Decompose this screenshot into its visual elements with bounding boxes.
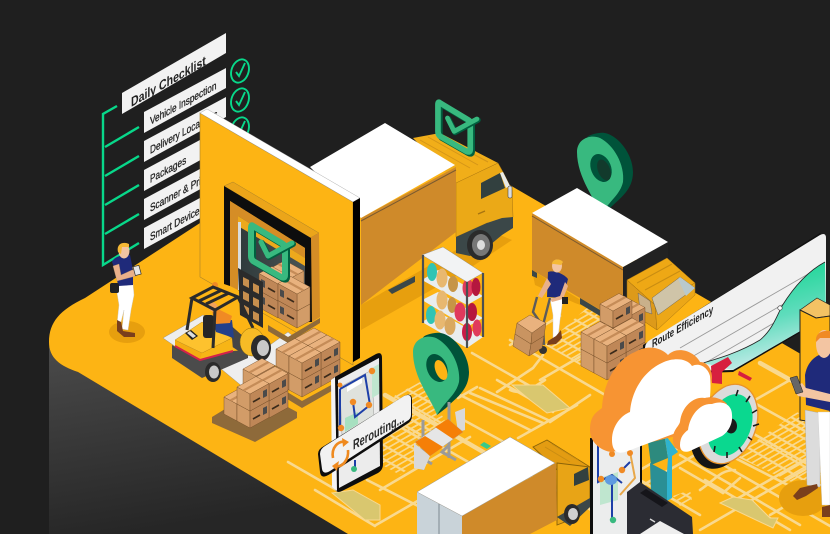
platform top surface xyxy=(49,162,830,534)
check circles xyxy=(228,57,252,143)
checklist row: scanner and printer xyxy=(144,155,226,220)
panel: daily checklist xyxy=(103,33,252,265)
forklift wheels xyxy=(205,335,271,382)
truck 3 xyxy=(417,437,590,534)
truck 3 cargo roof xyxy=(417,437,555,516)
checklist row: smart device xyxy=(144,184,226,249)
checklist header xyxy=(122,33,226,114)
tall yellow box xyxy=(800,298,830,425)
checklist row: delivery locations xyxy=(144,97,226,162)
rerouting callout: Rerouting... xyxy=(353,410,404,453)
street map on the platform xyxy=(288,305,830,530)
truck 1 cargo side xyxy=(361,167,456,305)
rerouting callout xyxy=(318,395,412,477)
green check badge above truck xyxy=(438,102,478,154)
truck 1 undercarriage xyxy=(388,276,415,294)
truck 2 cargo roof xyxy=(532,188,668,267)
checklist row: vehicle inspection: Vehicle Inspection xyxy=(150,80,217,128)
checklist row: delivery locations: Delivery Locations xyxy=(150,109,217,157)
person with tablet, left xyxy=(110,243,141,337)
wall face xyxy=(200,113,353,365)
forklift base xyxy=(172,345,248,378)
pallet with boxes near phone xyxy=(274,328,344,408)
checklist row: packages: Packages xyxy=(150,155,186,186)
truck 1 cab xyxy=(413,133,513,256)
truck 2 cargo back xyxy=(623,242,668,323)
road barrier xyxy=(414,402,465,470)
stacked boxes in doorway xyxy=(259,260,310,328)
checklist header: Daily Checklist xyxy=(131,52,206,110)
smartphone with map route xyxy=(331,353,383,492)
pallet with boxes front xyxy=(212,358,297,442)
hand truck frame and wheel xyxy=(533,297,550,345)
pin marker over map xyxy=(413,333,469,415)
wall top edge xyxy=(200,109,360,202)
checklist row: scanner and printer: Scanner & Printer xyxy=(150,168,216,215)
truck 3 cargo back doors xyxy=(417,492,462,534)
boxes beside truck 2 xyxy=(581,294,645,380)
mobile printer xyxy=(627,482,693,534)
shelving unit with rolls xyxy=(422,247,483,348)
icon: refresh arrows xyxy=(332,438,349,471)
forklift cage xyxy=(187,287,253,348)
forklift driver xyxy=(203,282,234,338)
forklift cylinder xyxy=(240,328,264,356)
checklist row: packages xyxy=(144,126,226,191)
forklift mast xyxy=(238,268,263,328)
loading dock door xyxy=(224,182,320,322)
platform side wall xyxy=(49,342,348,534)
route efficiency chart panel xyxy=(643,233,826,375)
truck 1 xyxy=(310,123,513,305)
checklist row: smart device: Smart Device xyxy=(150,205,200,244)
worker with phone, right xyxy=(790,330,830,517)
parks on the map xyxy=(332,385,778,528)
truck 2 cab xyxy=(627,258,695,330)
truck 1 cargo roof xyxy=(310,123,455,218)
forklift floor and seat xyxy=(205,322,253,352)
pallet inside door xyxy=(268,318,320,343)
checklist row: vehicle inspection xyxy=(144,68,226,133)
green check badge in doorway xyxy=(251,225,293,280)
truck 3 cargo side xyxy=(462,463,557,534)
cloud small xyxy=(673,397,732,452)
speed gauge xyxy=(680,357,768,477)
boxes on hand truck xyxy=(513,315,546,356)
gauge red knob xyxy=(711,357,732,384)
truck 2 cargo side xyxy=(532,213,623,323)
truck 1 wheel xyxy=(467,230,493,260)
forklift xyxy=(172,268,271,382)
wall end edge xyxy=(353,198,360,362)
smartphone right with map xyxy=(590,438,642,534)
cloud large xyxy=(590,348,712,453)
warehouse wall xyxy=(200,109,360,365)
pin marker above truck 2 xyxy=(577,133,633,215)
ground shadows under vehicles xyxy=(109,235,827,516)
truck 3 cab xyxy=(533,440,590,526)
white floor markings xyxy=(163,315,305,387)
truck 2 xyxy=(532,188,695,330)
worker pushing hand truck xyxy=(513,260,568,356)
green checklist bracket xyxy=(103,106,139,265)
route efficiency chart panel: Route Efficiency xyxy=(652,304,713,351)
chart curve area xyxy=(703,262,826,370)
chart gridlines xyxy=(680,266,822,366)
small green vehicle on road xyxy=(480,442,491,449)
forklift body xyxy=(175,322,233,360)
upload arrow xyxy=(648,433,678,501)
